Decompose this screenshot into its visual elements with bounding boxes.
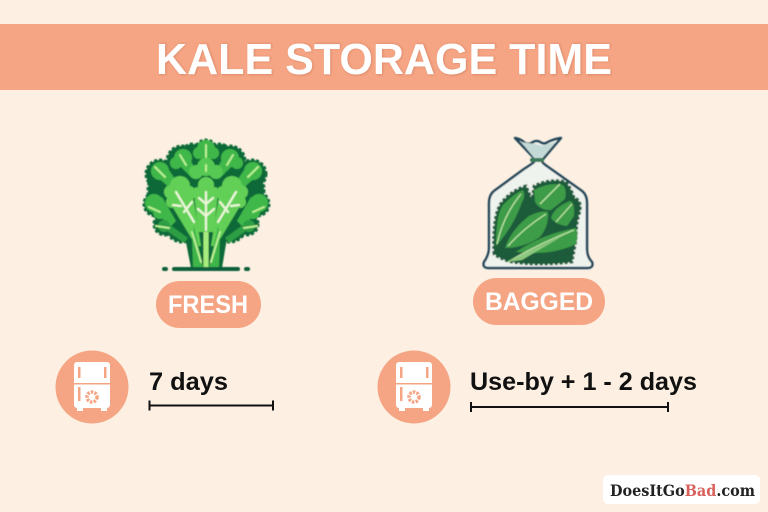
fresh pill: FRESH <box>168 291 248 319</box>
icon: fridge, bagged <box>378 350 450 424</box>
icon: fresh kale <box>144 140 269 271</box>
title banner <box>0 24 768 90</box>
fresh pill <box>156 281 261 328</box>
duration: fresh: 7 days <box>149 368 228 396</box>
bagged pill: BAGGED <box>485 288 593 316</box>
bagged pill <box>473 278 605 325</box>
duration: bagged: Use-by + 1 - 2 days <box>470 368 697 396</box>
duration: bagged <box>470 368 697 412</box>
duration: fresh <box>149 368 273 410</box>
title banner: KALE STORAGE TIME <box>157 34 613 85</box>
icon: fridge, fresh <box>56 350 128 424</box>
icon: bagged kale <box>484 138 592 268</box>
watermark: DoesItGoBad.com <box>610 481 756 500</box>
title banner: KALE STORAGE TIME <box>156 35 612 84</box>
watermark <box>603 475 760 504</box>
